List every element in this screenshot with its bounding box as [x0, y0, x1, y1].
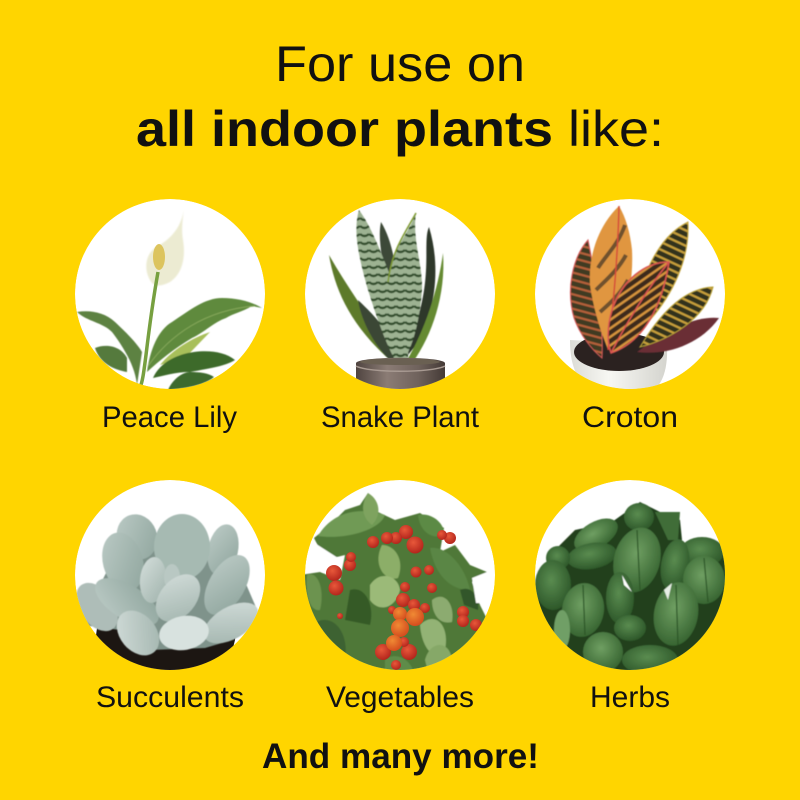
photo circle: succulents	[68, 480, 265, 680]
panel: herbs	[535, 480, 730, 714]
icon: white pot	[570, 340, 667, 392]
icon: basil foliage	[535, 502, 730, 680]
panel: succulents	[68, 480, 265, 714]
photo circle: herbs	[535, 480, 730, 680]
panel: croton	[535, 199, 725, 434]
title: For use on	[275, 36, 525, 92]
icon: succulent rosette	[76, 514, 258, 656]
panel: vegetables	[300, 480, 495, 714]
photo circle: vegetables	[300, 480, 495, 680]
label: Croton: Croton	[582, 401, 678, 434]
icon: soil	[574, 333, 664, 371]
icon: tomato foliage	[300, 493, 490, 680]
icon: leaves	[77, 298, 262, 390]
panel: snake plant	[305, 199, 495, 434]
icon: spadix	[153, 244, 165, 270]
label: Peace Lily: Peace Lily	[102, 401, 237, 434]
panel: peace lily	[75, 199, 265, 434]
icon: metal pot	[356, 358, 445, 390]
icon: soil	[96, 628, 236, 670]
label: Vegetables: Vegetables	[326, 681, 474, 714]
label: Herbs: Herbs	[590, 681, 670, 714]
title	[136, 36, 664, 157]
photo circle: croton	[535, 199, 725, 392]
icon: white spathe	[146, 208, 184, 286]
footer callout: And many more!	[262, 737, 539, 776]
icon: sansevieria leaves	[329, 210, 443, 362]
title: all indoor plants like:	[136, 101, 664, 157]
label: Succulents: Succulents	[96, 681, 244, 714]
icon: tomatoes	[326, 525, 482, 670]
photo circle: peace lily	[75, 199, 265, 390]
icon: stem	[140, 272, 158, 388]
photo circle: snake plant	[305, 199, 495, 390]
icon: croton leaves	[570, 206, 719, 358]
label: Snake Plant: Snake Plant	[321, 401, 480, 434]
